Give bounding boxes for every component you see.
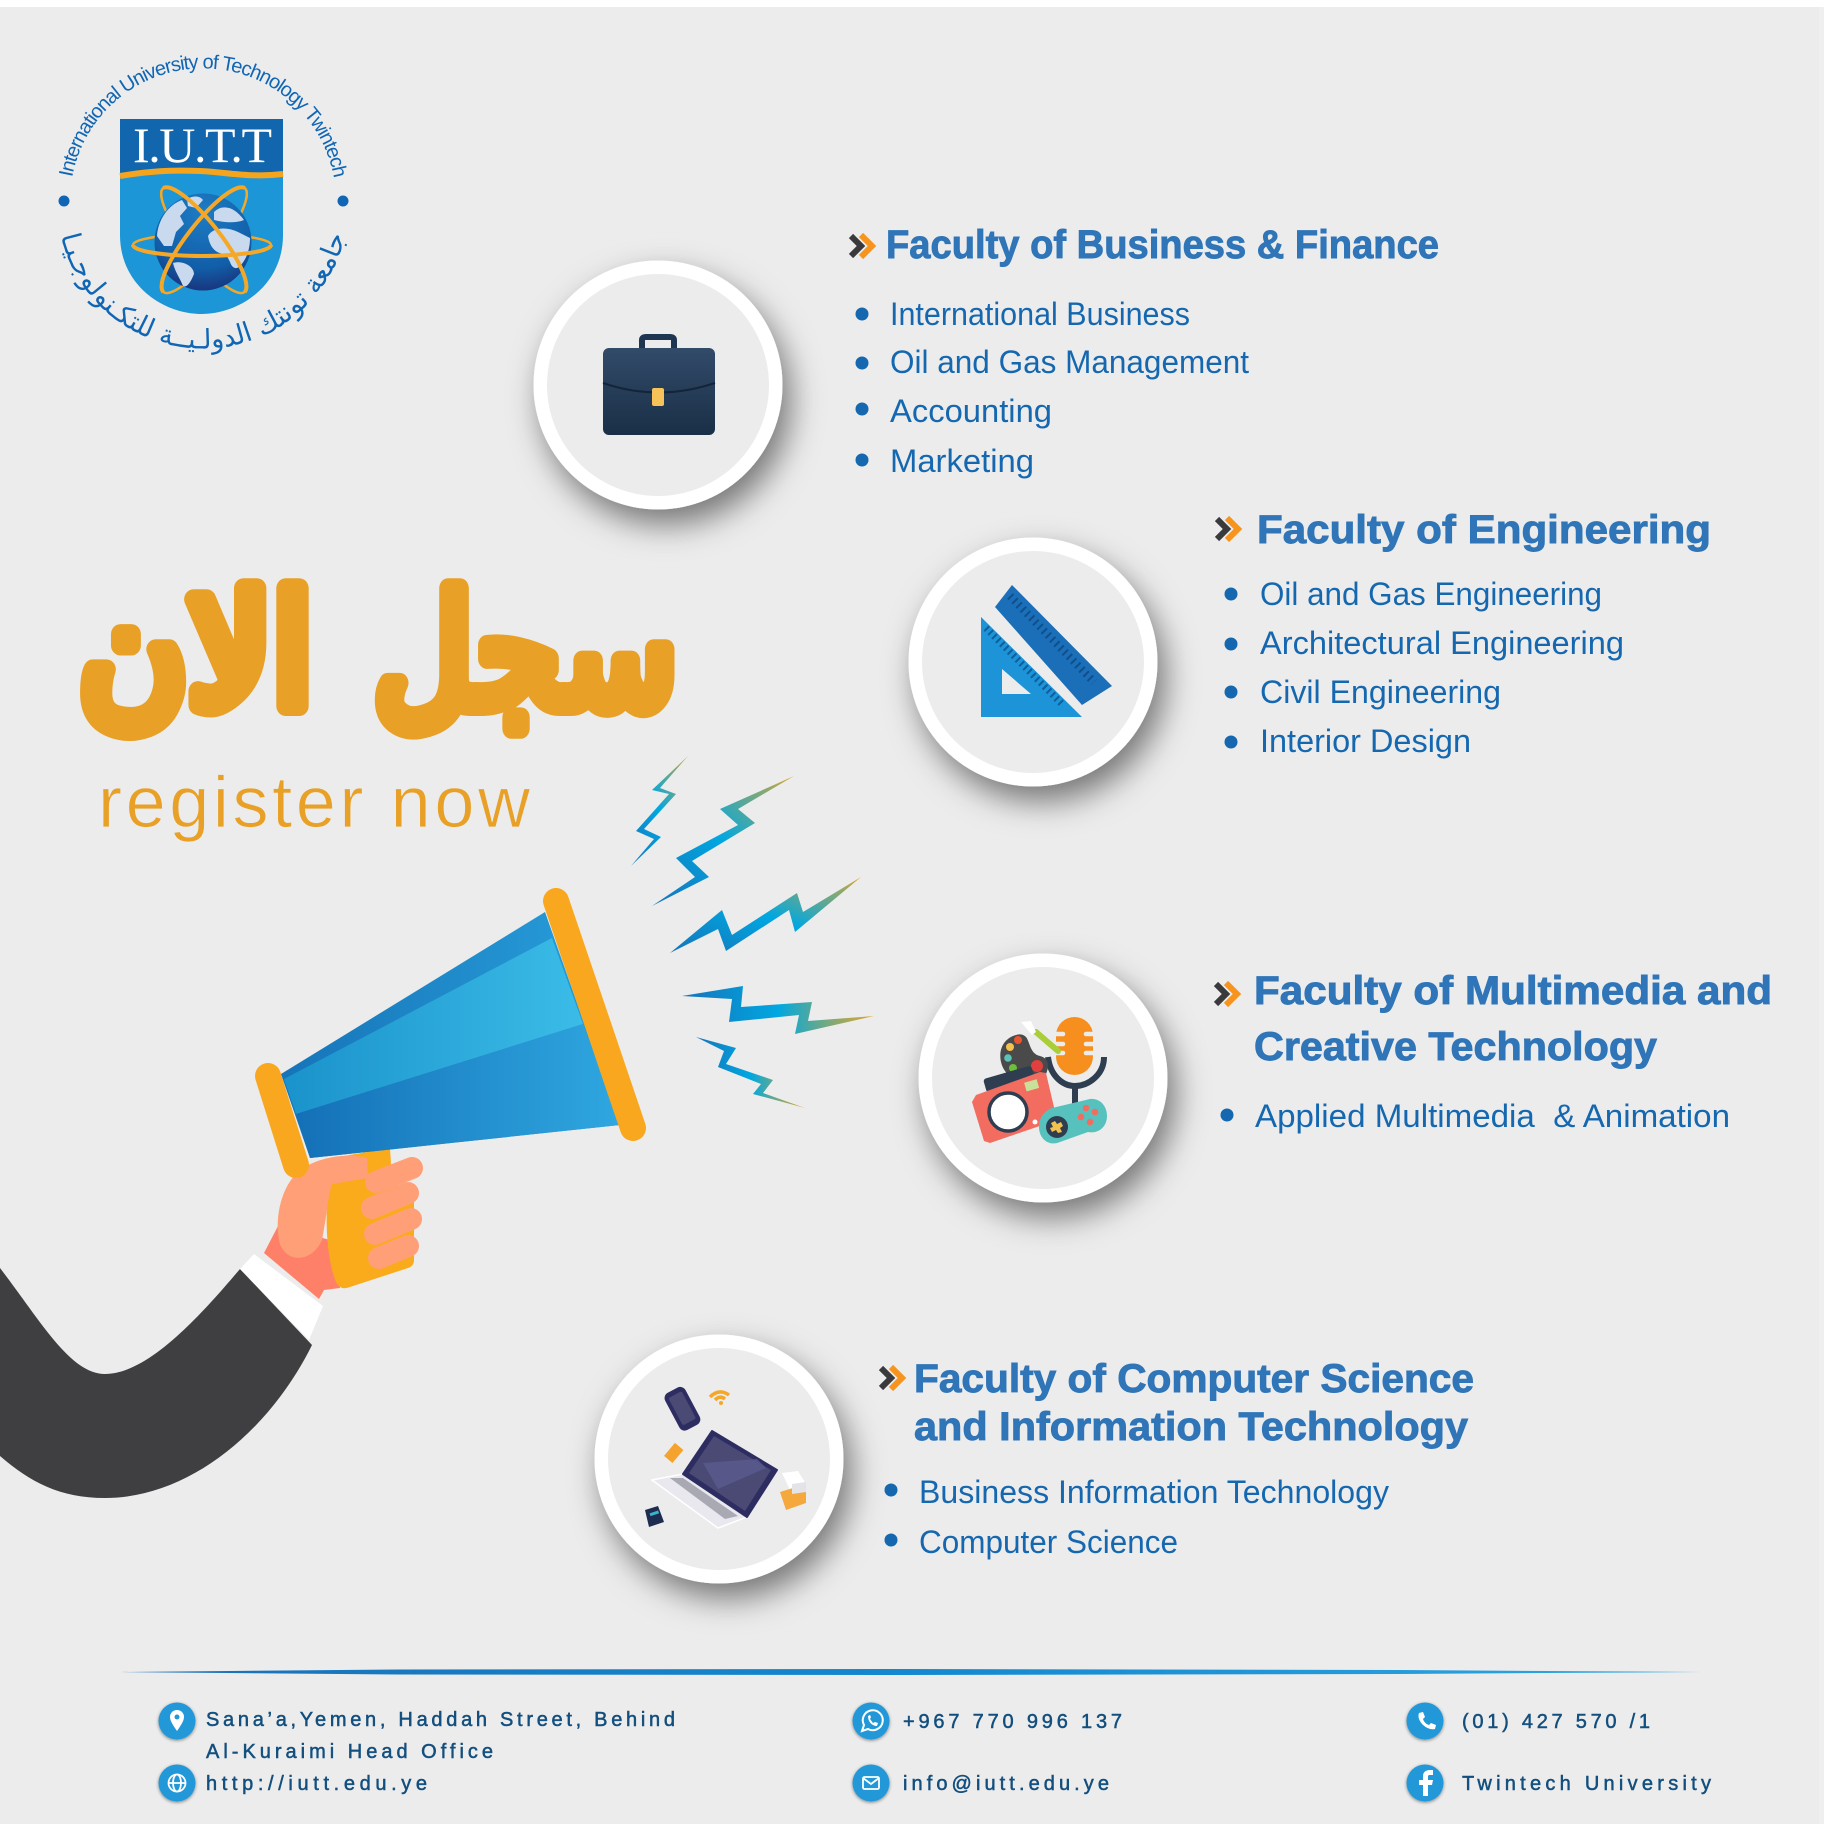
website: http://iutt.edu.ye	[206, 1773, 427, 1795]
cone	[281, 912, 620, 1158]
word: alan: الان	[79, 562, 313, 743]
rims	[268, 901, 633, 1165]
faculty: computer science	[881, 1357, 1474, 1560]
icon: web	[158, 1764, 196, 1802]
logo dots	[58, 196, 348, 206]
icon: email	[852, 1764, 890, 1802]
course list	[884, 1474, 1389, 1560]
course list: Accounting	[890, 393, 1052, 429]
footer contacts	[158, 1702, 1711, 1802]
handle	[327, 1148, 414, 1288]
course list: International Business	[890, 296, 1190, 332]
address	[206, 1709, 675, 1763]
course list: Architectural Engineering	[1260, 625, 1624, 661]
logo shield	[120, 117, 283, 314]
chevrons	[851, 235, 872, 257]
course list: Oil and Gas Engineering	[1260, 576, 1602, 612]
icon: laptop set	[645, 1385, 806, 1528]
chevrons	[881, 1367, 902, 1389]
footer divider	[120, 1669, 1702, 1675]
course list	[856, 296, 1249, 479]
arabic headline	[79, 562, 677, 743]
sleeve	[0, 1268, 312, 1498]
wrist	[264, 1226, 340, 1299]
register now: register now	[98, 763, 531, 843]
icon: rulers	[981, 585, 1112, 717]
logo shield: I.U.T.T	[133, 117, 272, 173]
faculty: multimedia	[1216, 969, 1772, 1134]
cuff	[240, 1254, 323, 1340]
icon: facebook	[1406, 1764, 1444, 1802]
logo ring text arabic: جامعة تونتك الدولـيــة للتكـنولوجـيـا	[62, 232, 347, 355]
icon: multimedia set	[972, 1017, 1107, 1143]
fingers	[372, 1168, 412, 1258]
course list: Applied Multimedia & Animation	[1255, 1098, 1730, 1134]
icon: whatsapp	[852, 1702, 890, 1740]
email: info@iutt.edu.ye	[903, 1773, 1109, 1795]
facebook name: Twintech University	[1462, 1773, 1711, 1795]
course list: Civil Engineering	[1260, 674, 1501, 710]
course list: Business Information Technology	[919, 1474, 1389, 1510]
logo	[58, 54, 348, 355]
faculty: engineering	[1217, 508, 1711, 759]
palm	[278, 1156, 368, 1258]
heading: Faculty of Business & Finance	[886, 223, 1439, 267]
chevrons	[1216, 983, 1237, 1005]
course list: Oil and Gas Management	[890, 344, 1249, 380]
address: Al-Kuraimi Head Office	[206, 1741, 493, 1763]
course list	[1224, 576, 1624, 759]
heading: Creative Technology	[1254, 1025, 1658, 1069]
address: Sana’a,Yemen, Haddah Street, Behind	[206, 1709, 675, 1731]
icon: location	[158, 1702, 196, 1740]
icon: phone	[1406, 1702, 1444, 1740]
heading: Faculty of Computer Science	[914, 1357, 1474, 1401]
heading: Faculty of Multimedia and	[1254, 969, 1772, 1013]
logo ring text english: International University of Technology Twintech	[59, 54, 347, 178]
icon: briefcase	[603, 337, 715, 435]
heading	[1254, 969, 1772, 1069]
circle: business	[534, 260, 782, 510]
whatsapp number: +967 770 996 137	[903, 1711, 1122, 1733]
course list: Interior Design	[1260, 723, 1471, 759]
lightning bolts	[631, 756, 874, 1108]
chevrons	[1217, 518, 1238, 540]
heading: and Information Technology	[914, 1405, 1469, 1449]
word: sajjil: سجل	[374, 562, 677, 743]
phone number: (01) 427 570 /1	[1462, 1711, 1650, 1733]
megaphone and arm	[0, 901, 633, 1498]
heading: Faculty of Engineering	[1257, 508, 1711, 552]
faculty: business and finance	[851, 223, 1439, 479]
circle: engineering	[908, 538, 1158, 786]
heading	[914, 1357, 1474, 1449]
circle: computer science	[594, 1334, 844, 1584]
course list: Marketing	[890, 443, 1034, 479]
circle: multimedia	[918, 954, 1168, 1202]
course list: Computer Science	[919, 1524, 1178, 1560]
